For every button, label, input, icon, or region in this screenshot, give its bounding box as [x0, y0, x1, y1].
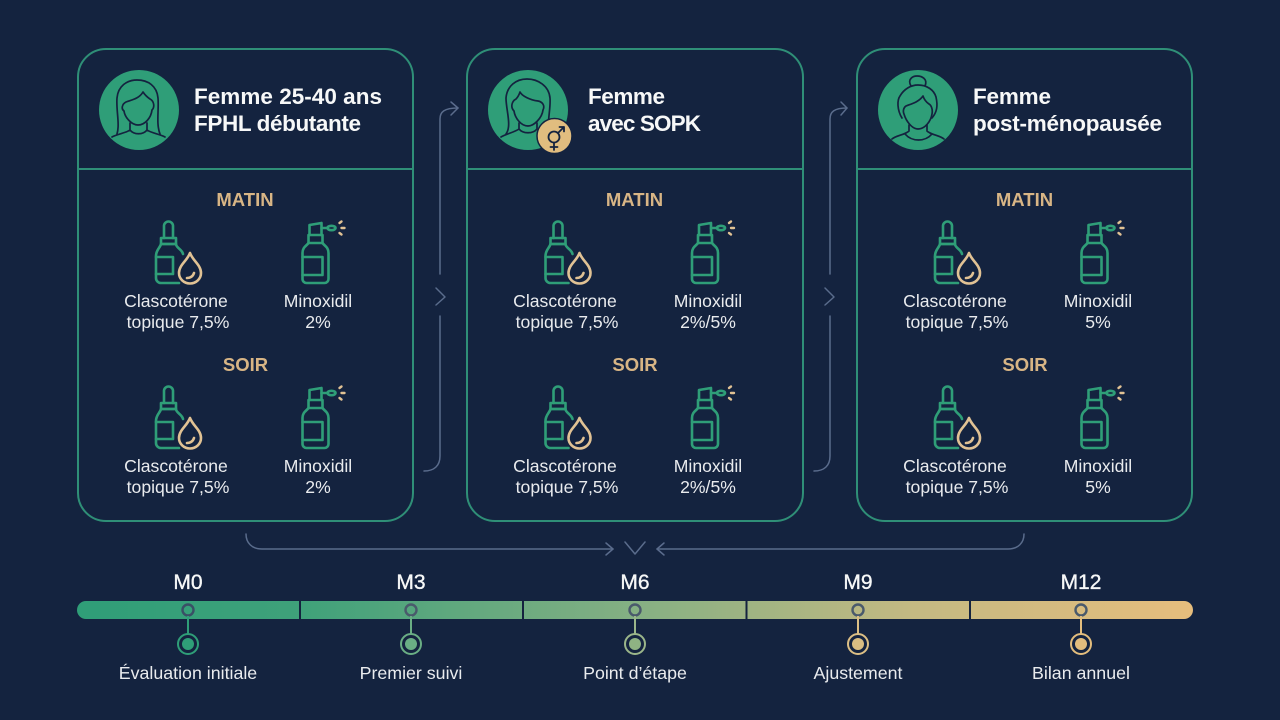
panel: femme post-menopausee: [857, 49, 1192, 521]
icon: spray bottle: [692, 386, 734, 448]
panel: femme 25-40 ans: [78, 49, 413, 521]
timeline bar: [77, 600, 1193, 620]
text: clascoterone evening: topique 7,5%: [127, 477, 230, 497]
milestone M12: Bilan annuel: [1032, 663, 1130, 683]
icon: spray bottle: [692, 222, 734, 283]
heading: soir: SOIR: [223, 354, 268, 375]
text: minoxidil evening: Minoxidil: [284, 456, 352, 476]
icon: dropper bottle: [156, 386, 201, 448]
icon: spray bottle: [302, 386, 344, 448]
text: clascoterone evening: [513, 456, 619, 497]
arrows: cards converge to timeline: [246, 534, 1024, 555]
text: clascoterone morning: Clascotérone: [903, 291, 1007, 311]
text: minoxidil evening: [1064, 456, 1132, 497]
milestone M0: M0: [173, 571, 203, 594]
heading: profile: [973, 84, 1162, 136]
text: minoxidil morning: [284, 291, 352, 332]
text: minoxidil morning: Minoxidil: [284, 291, 352, 311]
icon: woman with long hair avatar: [99, 70, 179, 150]
text: minoxidil morning: [674, 291, 742, 332]
milestone M6: Point d’étape: [583, 663, 687, 683]
text: minoxidil evening: 2%/5%: [680, 477, 736, 497]
text: clascoterone evening: topique 7,5%: [516, 477, 619, 497]
heading: soir: SOIR: [612, 354, 658, 375]
milestone M3: [360, 571, 462, 683]
milestone M9: M9: [843, 571, 873, 594]
text: clascoterone evening: [124, 456, 230, 497]
text: clascoterone evening: Clascotérone: [124, 456, 228, 476]
text: minoxidil evening: Minoxidil: [1064, 456, 1132, 476]
milestone M9: [814, 571, 903, 683]
icon: dropper bottle: [935, 386, 980, 448]
timeline: [77, 571, 1193, 683]
icon: spray bottle: [1082, 386, 1124, 448]
text: minoxidil evening: [284, 456, 352, 497]
text: clascoterone morning: [124, 291, 230, 332]
text: clascoterone evening: Clascotérone: [513, 456, 617, 476]
icon: spray bottle: [302, 222, 344, 283]
text: minoxidil evening: 5%: [1085, 477, 1111, 497]
arrow: card 2 to card 3: [814, 102, 847, 471]
heading: matin: MATIN: [216, 189, 274, 210]
icon: spray bottle: [1082, 222, 1124, 283]
icon: woman with hormone badge avatar: [488, 70, 572, 154]
heading: matin: MATIN: [606, 189, 663, 210]
heading: profile: avec SOPK: [588, 111, 702, 136]
heading: profile: [194, 84, 382, 136]
text: clascoterone morning: Clascotérone: [124, 291, 228, 311]
heading: profile: Femme: [588, 84, 665, 109]
icon: dropper bottle: [546, 386, 590, 448]
text: minoxidil morning: [1064, 291, 1132, 332]
heading: profile: Femme 25-40 ans: [194, 84, 382, 109]
milestone M0: Évaluation initiale: [119, 663, 257, 683]
heading: profile: Femme: [973, 84, 1051, 109]
text: minoxidil morning: 2%: [305, 312, 331, 332]
text: clascoterone morning: [513, 291, 619, 332]
text: clascoterone evening: Clascotérone: [903, 456, 1007, 476]
text: clascoterone morning: Clascotérone: [513, 291, 617, 311]
milestone M6: M6: [620, 571, 650, 594]
milestone M0: [119, 571, 257, 683]
text: clascoterone morning: topique 7,5%: [906, 312, 1009, 332]
heading: soir: SOIR: [1002, 354, 1048, 375]
text: minoxidil morning: 5%: [1085, 312, 1111, 332]
heading: profile: post-ménopausée: [973, 111, 1162, 136]
milestone M6: [583, 571, 687, 683]
arrow: card 1 to card 2: [424, 102, 458, 471]
milestone M9: Ajustement: [814, 663, 903, 683]
heading: profile: [588, 84, 702, 136]
text: minoxidil morning: 2%/5%: [680, 312, 736, 332]
milestone M3: Premier suivi: [360, 663, 462, 683]
panel: femme avec SOPK: [467, 49, 803, 521]
milestone M12: [1032, 571, 1130, 683]
text: minoxidil morning: Minoxidil: [1064, 291, 1132, 311]
icon: dropper bottle: [156, 222, 201, 284]
milestone M3: M3: [396, 571, 426, 594]
heading: profile: FPHL débutante: [194, 111, 361, 136]
text: clascoterone morning: topique 7,5%: [516, 312, 619, 332]
text: minoxidil morning: Minoxidil: [674, 291, 742, 311]
text: clascoterone evening: [903, 456, 1009, 497]
text: clascoterone morning: [903, 291, 1009, 332]
icon: dropper bottle: [935, 222, 980, 284]
text: clascoterone evening: topique 7,5%: [906, 477, 1009, 497]
milestone M12: M12: [1061, 571, 1101, 594]
text: minoxidil evening: [674, 456, 742, 497]
text: clascoterone morning: topique 7,5%: [127, 312, 230, 332]
icon: woman with hair bun avatar: [878, 70, 958, 150]
icon: gender badge: [537, 118, 572, 154]
icon: dropper bottle: [546, 222, 590, 284]
heading: matin: MATIN: [996, 189, 1053, 210]
text: minoxidil evening: 2%: [305, 477, 331, 497]
text: minoxidil evening: Minoxidil: [674, 456, 742, 476]
